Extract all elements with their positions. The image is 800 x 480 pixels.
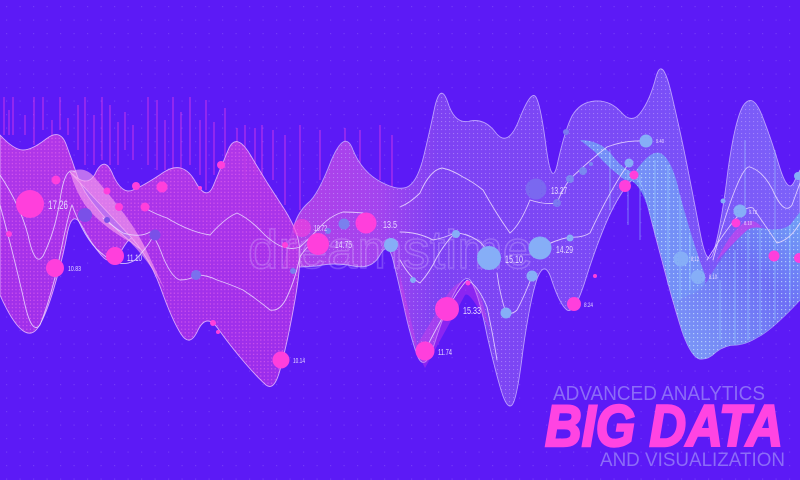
waveform band: lower right ribbon bbox=[673, 212, 800, 359]
waveform band: left pink bbox=[0, 135, 144, 333]
waveform band: overlap highlight bbox=[70, 170, 165, 290]
waveform band: cyan ribbon bbox=[580, 140, 705, 300]
value labels: 9.12 bbox=[749, 210, 757, 216]
value labels: 14.29 bbox=[556, 245, 573, 256]
title block bbox=[545, 382, 785, 471]
value labels: 8.12 bbox=[691, 257, 699, 263]
value labels: 8.24 bbox=[584, 303, 594, 309]
bubbles: blue data points bbox=[78, 129, 800, 318]
vertical data spikes bbox=[4, 97, 392, 210]
cyan vertical data lines bbox=[610, 140, 790, 345]
value labels: 14.75 bbox=[335, 240, 352, 251]
value labels: 13.27 bbox=[551, 186, 567, 197]
waveform band: centre pink bbox=[70, 142, 300, 386]
value labels: 10.72 bbox=[314, 224, 327, 233]
value labels: 10.14 bbox=[293, 358, 305, 365]
value labels: 17.26 bbox=[48, 198, 68, 212]
pink edge glow bbox=[400, 275, 490, 368]
subtitle bottom: AND VISUALIZATION bbox=[600, 450, 785, 471]
waveform band: right mauve to blue envelope bbox=[283, 69, 800, 406]
value labels: 13.5 bbox=[383, 220, 397, 231]
value labels: 8.10 bbox=[709, 275, 717, 281]
value labels: 15.33 bbox=[463, 306, 481, 317]
value labels bbox=[48, 139, 757, 365]
value labels: 9.40 bbox=[656, 139, 664, 145]
pink edge accent right bbox=[716, 221, 762, 262]
value labels: 11.10 bbox=[127, 253, 142, 263]
value labels: 11.74 bbox=[438, 348, 452, 357]
trend lines bbox=[0, 141, 800, 360]
subtitle top: ADVANCED ANALYTICS bbox=[553, 382, 765, 405]
value labels: 8.10 bbox=[744, 221, 752, 227]
value labels: 10.83 bbox=[68, 266, 81, 273]
value labels: 15.10 bbox=[505, 254, 523, 266]
watermark: dreamstime bbox=[248, 220, 533, 280]
bubbles: pink data points bbox=[6, 161, 800, 368]
